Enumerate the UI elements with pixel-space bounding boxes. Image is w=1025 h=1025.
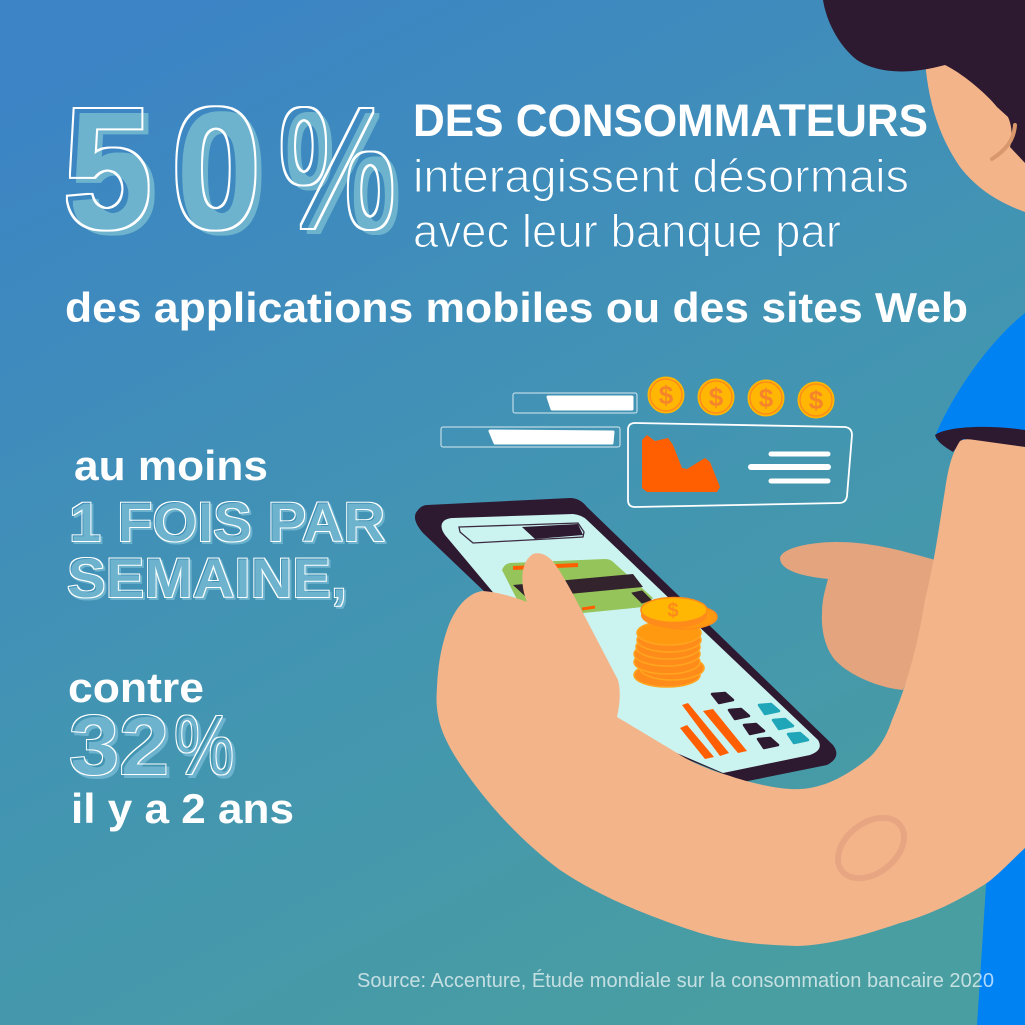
dark buttons bbox=[712, 693, 778, 748]
heading light lines bbox=[413, 150, 909, 257]
big stat: 50%: % bbox=[279, 74, 395, 264]
stat: 32% bbox=[69, 698, 234, 792]
floating bar 2 bbox=[441, 427, 620, 447]
dollar coins row: $ bbox=[659, 380, 674, 410]
elbow ring bbox=[826, 806, 916, 890]
source: Source: Accenture, Étude mondiale sur la consommation bancaire 2020 bbox=[357, 969, 994, 992]
floating bar 1 bbox=[513, 393, 637, 413]
person: face bbox=[925, 60, 1025, 212]
credit card bbox=[502, 559, 653, 625]
coin stack bbox=[634, 598, 717, 687]
phone bbox=[415, 498, 836, 782]
person: pointing hand bbox=[780, 542, 940, 690]
heading light lines: avec leur banque par bbox=[413, 205, 841, 257]
stat: 32%: 32 bbox=[69, 698, 169, 792]
big stat: 50%: 5 bbox=[64, 74, 151, 264]
big stat: 50%: 0 bbox=[172, 74, 260, 264]
bar chart on phone bbox=[680, 703, 747, 759]
text: au moins: au moins bbox=[74, 442, 268, 489]
stat: 32%: % bbox=[174, 698, 234, 792]
phone screen bbox=[442, 514, 820, 773]
area chart bbox=[642, 435, 720, 492]
teal buttons bbox=[759, 704, 808, 743]
person: hair bbox=[823, 0, 1025, 163]
heading light lines: interagissent désormais bbox=[413, 150, 909, 202]
heading bold line: DES CONSOMMATEURS bbox=[413, 95, 928, 146]
big stat: 50% bbox=[64, 74, 395, 264]
dollar coins row: $ bbox=[709, 382, 724, 412]
subheading: des applications mobiles ou des sites Web bbox=[65, 284, 968, 331]
phone body bbox=[415, 498, 836, 782]
stat: 1 fois par semaine: 1 FOIS PAR bbox=[69, 490, 385, 553]
stat: 1 fois par semaine bbox=[67, 490, 385, 609]
person: ear line bbox=[992, 125, 1015, 159]
person: blue shirt body bbox=[977, 840, 1025, 1025]
person: sleeve hem bbox=[935, 427, 1025, 452]
floating chart panel bbox=[628, 423, 852, 507]
text: il y a 2 ans: il y a 2 ans bbox=[71, 785, 294, 832]
stat: 1 fois par semaine: SEMAINE, bbox=[67, 546, 347, 609]
text: contre: contre bbox=[68, 664, 204, 711]
progress bar bbox=[459, 523, 584, 543]
dollar coins row: $ bbox=[809, 385, 824, 415]
coin stack: $ bbox=[667, 600, 679, 622]
text lines bbox=[751, 454, 828, 481]
person: blue shirt sleeve bbox=[936, 313, 1025, 440]
person: holding arm and hand bbox=[437, 439, 1025, 946]
dollar coins row bbox=[648, 377, 834, 418]
dollar coins row: $ bbox=[759, 383, 774, 413]
